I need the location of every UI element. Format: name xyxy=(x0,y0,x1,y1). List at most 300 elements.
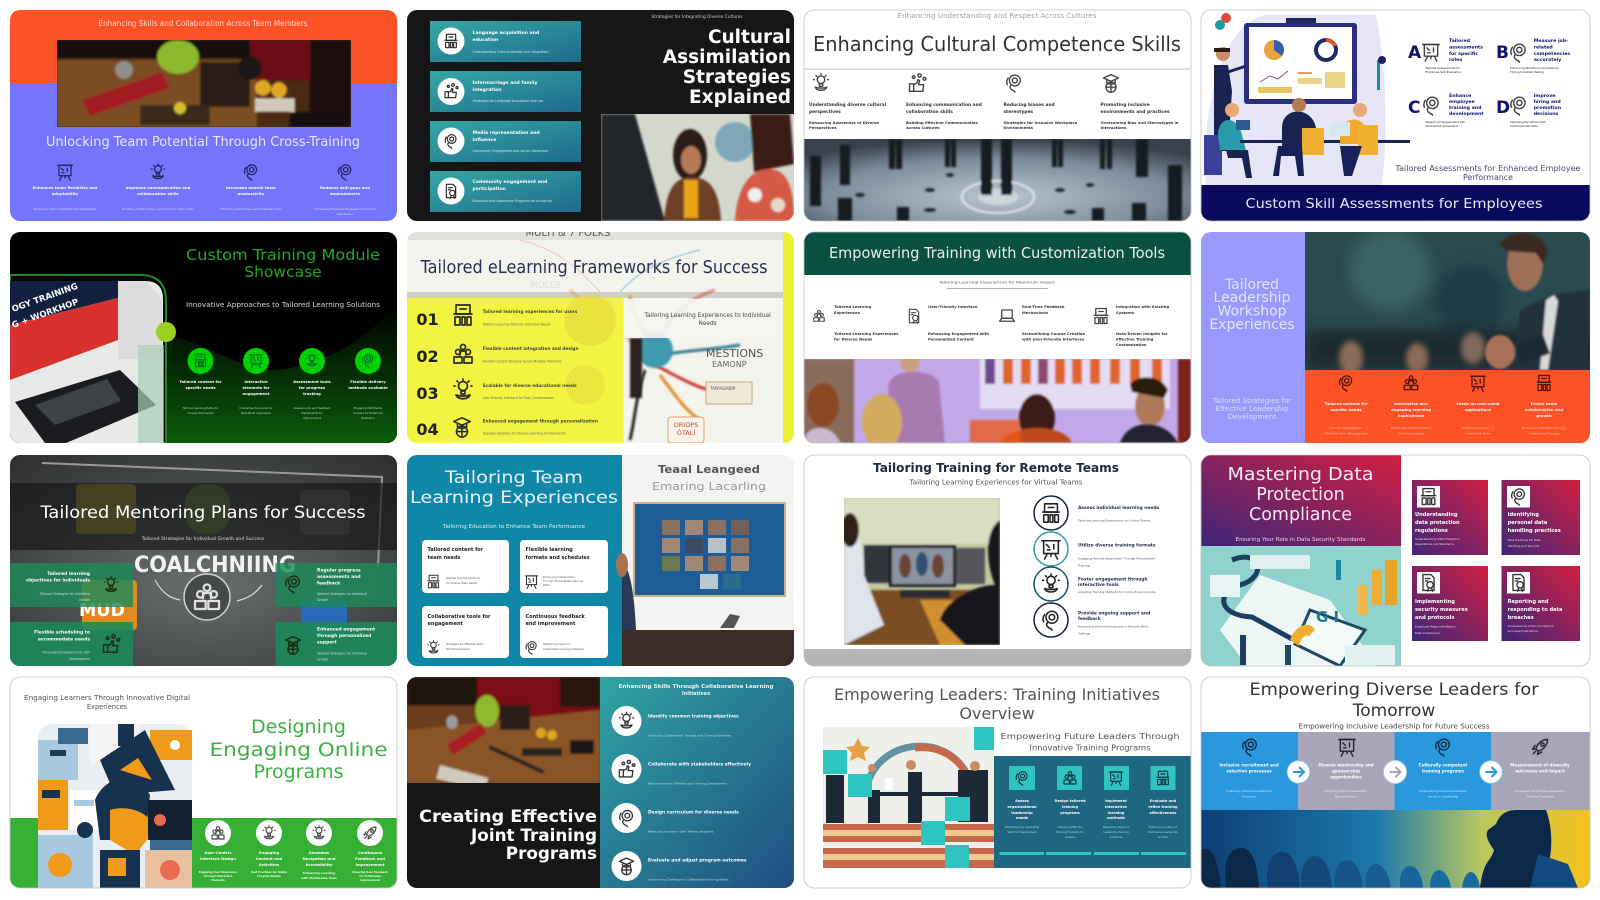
item: navigation: Seamless xyxy=(309,850,330,855)
item: design: Design tailored xyxy=(1054,799,1086,803)
card: continuous feedback: and improvement xyxy=(526,621,576,627)
step: evaluate: Overcoming Challenges in Collaborative Training Efforts xyxy=(648,878,729,882)
item: design: programs xyxy=(1060,811,1080,815)
item: team: Customized Training xyxy=(1529,432,1559,436)
panel: mentoring plans slide xyxy=(10,455,398,666)
title banner xyxy=(804,232,1191,275)
item 04 xyxy=(416,418,598,439)
item: biases: Reducing biases and xyxy=(1004,102,1055,108)
item: feedback: Streamlining Course Creation xyxy=(1022,331,1086,336)
item: engagement: Adapting Training Methods for Online Environments xyxy=(1078,590,1156,594)
title xyxy=(1250,680,1538,721)
title: Engaging Online xyxy=(210,739,388,761)
title: Strategies xyxy=(683,67,791,88)
card: personal data xyxy=(1502,480,1580,555)
subtitle: Innovative Training Programs xyxy=(1030,742,1150,752)
item: inclusive: Overcoming Bias and Stereotypes in xyxy=(1100,120,1179,125)
left column: Tailored xyxy=(1224,277,1279,293)
item D: promotion xyxy=(1534,105,1561,111)
photo: audience silhouettes xyxy=(1201,810,1590,888)
item: engagement xyxy=(1034,567,1156,601)
item: implement: Measuring Impact of xyxy=(1103,825,1129,829)
item: user-centric: User-Centric xyxy=(204,850,232,855)
column: measurement: Training Programs xyxy=(1525,794,1554,798)
item: community: participation xyxy=(472,186,506,192)
item: engaging content: Best Practices for Online xyxy=(251,870,287,874)
item: scheduling: accommodate needs xyxy=(38,636,90,642)
left column: Workshop xyxy=(1217,304,1287,320)
subtitle: Enhancing Understanding and Respect Across Cultures xyxy=(898,11,1097,20)
photo: video conference room: Emaring Lacarling xyxy=(652,481,766,493)
background mind map: MESTIONS xyxy=(706,347,763,360)
title block: Ensuring Your Role in Data Security Standards xyxy=(1236,537,1366,543)
item: intermarriage: integration xyxy=(472,87,502,93)
item: community: Education and Awareness Programs for Inclusivity xyxy=(472,199,552,203)
item 01: Tailored learning experiences for users xyxy=(483,309,578,315)
item: assessment: Improvement xyxy=(303,416,321,420)
column: recruitment xyxy=(1201,732,1298,810)
illustration: isometric documents: G I xyxy=(1316,608,1339,626)
item: integration: Effective Training xyxy=(1116,336,1154,342)
item: engagement: Enhanced engagement xyxy=(317,626,376,632)
item: skill gaps: Increasing Employee Engagement and Job xyxy=(314,207,376,211)
item: progress: Growth xyxy=(317,598,328,602)
background mind map: TAPPAGMIDP xyxy=(709,386,736,391)
title: Overview xyxy=(959,704,1035,723)
card: security: Data Compliance xyxy=(1415,631,1440,635)
item: tailored learning: Experiences xyxy=(834,310,861,315)
item D: D xyxy=(1496,98,1510,118)
item: navigation: Navigation and xyxy=(303,856,336,861)
item: design: Training Programs for xyxy=(1056,830,1085,834)
card: tailored content: Tailored content for xyxy=(428,547,484,553)
item: user-centric: Engaging User Experience xyxy=(199,870,237,874)
item: design: Designing Effective xyxy=(1057,825,1083,829)
item: assess needs xyxy=(1034,496,1160,530)
title: Programs xyxy=(506,843,597,863)
left column: Leadership xyxy=(1214,290,1291,306)
item: communication: Improves communication and xyxy=(126,185,191,190)
item: assess needs: Assess individual learning needs xyxy=(1078,505,1160,511)
subtitle: Empowering Inclusive Leadership for Future Success xyxy=(1298,722,1490,730)
subtitle: Tailored Strategies for Individual Growth and Success xyxy=(141,536,265,542)
orange band xyxy=(1305,370,1590,443)
item: feedback xyxy=(352,820,388,882)
item: assessment: for progress xyxy=(299,385,326,390)
item: evaluate xyxy=(1141,766,1186,855)
item: delivery xyxy=(348,348,388,420)
photo: laptop and training brochure: OGY TRAINING xyxy=(11,282,79,315)
step: objectives xyxy=(612,706,739,738)
title: Tailored eLearning Frameworks for Success xyxy=(420,258,768,278)
step: stakeholders: Collaborate with stakeholders effectively xyxy=(648,762,751,768)
item: delivery: Engaging Multimedia xyxy=(354,406,383,410)
card: personal data: handling practices xyxy=(1508,528,1561,534)
item: media: influence xyxy=(472,137,496,143)
item: evaluate: Fostering a Culture of xyxy=(1149,825,1177,829)
card: breaches: and Legal Implications xyxy=(1508,629,1538,633)
item: tailored content: Diverse Skill Levels xyxy=(188,411,214,415)
subtitle xyxy=(1000,731,1180,752)
column: recruitment: selection processes xyxy=(1226,768,1272,774)
item C: employee xyxy=(1449,99,1475,105)
item 03: User-Friendly Interface for Easy Customization xyxy=(483,396,554,400)
step: evaluate: Evaluate and adjust program outcomes xyxy=(648,858,747,864)
card: breaches: breaches xyxy=(1508,615,1534,621)
item D: Customized Skill Tests xyxy=(1510,124,1538,128)
photo: laptop and training brochure xyxy=(10,275,176,443)
item 03: 03 xyxy=(416,384,439,403)
item: communication: Boosting Collaboration and Communication Skills xyxy=(122,207,194,211)
column: recruitment: Practices xyxy=(1242,794,1256,798)
item: implement: learning xyxy=(1108,811,1125,815)
arrow: first xyxy=(1287,760,1310,784)
item: feedback: Feedback and xyxy=(355,856,385,861)
item: tailored content xyxy=(1324,376,1368,436)
item: community xyxy=(430,171,581,212)
card: personal data: personal data xyxy=(1508,520,1548,526)
item: diverse formats xyxy=(1034,532,1156,568)
panel: online programs slide xyxy=(10,677,397,888)
photo: training equipment xyxy=(57,40,351,127)
item: ongoing support: feedback xyxy=(1078,616,1101,622)
item B: B xyxy=(1496,43,1509,63)
item: integration: Integration with Existing xyxy=(1116,304,1169,309)
item: progress: assessments and xyxy=(317,574,361,580)
item: integration: Systems xyxy=(1116,310,1135,315)
card: collaborative tools: Strategies for Effective Team xyxy=(446,642,484,646)
item: biases: Strategies for Inclusive Workplace xyxy=(1004,120,1078,125)
item: productivity: Increases overall team xyxy=(226,185,276,190)
background mind map: MOLLS xyxy=(530,281,561,291)
item: interactive: experiences xyxy=(1398,413,1425,418)
card: flexible learning: Enhancing Collaboration xyxy=(543,575,575,579)
title: Tailoring Team xyxy=(444,468,583,487)
subtitle: Engaging Learners Through Innovative Digital xyxy=(24,694,190,702)
title xyxy=(210,716,388,783)
panel: diverse leaders slide xyxy=(1201,677,1590,888)
item: language xyxy=(430,21,581,62)
title: Designing xyxy=(251,716,346,738)
item: biases: Environments xyxy=(1004,125,1034,130)
subtitle: Tailored Assessments for Enhanced Employee xyxy=(1394,164,1581,173)
title block: Protection xyxy=(1256,485,1345,505)
item: progress: feedback xyxy=(317,580,341,586)
item: productivity: productivity xyxy=(238,191,265,196)
arrow: third xyxy=(1480,760,1502,784)
item: implement: methods xyxy=(1107,816,1125,820)
card: personal data: Identifying xyxy=(1508,512,1539,518)
item A: assessments xyxy=(1449,44,1483,50)
item 04: 04 xyxy=(416,420,439,439)
photo: presenter with chart xyxy=(804,352,1191,450)
background mind map: ORIOPS xyxy=(674,421,698,429)
item: implement: interactive xyxy=(1105,805,1128,809)
panel: cultural competence slide xyxy=(804,10,1191,221)
card: continuous feedback: Continuous feedback xyxy=(526,614,586,620)
column: training xyxy=(1394,732,1491,810)
title bar xyxy=(1201,185,1590,221)
item: assessment: Assessments and Feedback xyxy=(293,406,331,410)
item: perspectives: Understanding diverse cultural xyxy=(809,102,887,108)
item: inclusive xyxy=(1100,75,1179,130)
item: inclusive: Interactions xyxy=(1100,125,1127,130)
subtitle: Empowering Future Leaders Through xyxy=(1000,731,1180,741)
item: navigation: Enhancing Learning xyxy=(303,871,335,875)
card: security: Employee Responsibilities in xyxy=(1415,624,1456,628)
item: design: training xyxy=(1062,805,1078,809)
photo: laptop and training brochure: G + WORKHOP xyxy=(11,297,80,331)
card: continuous feedback xyxy=(520,606,608,658)
item: interactive: Interactive xyxy=(244,379,268,384)
item: tailored content: Tailored Strategies for xyxy=(1329,426,1363,430)
title: Tailoring Training for Remote Teams xyxy=(873,461,1119,475)
title block: Mastering Data xyxy=(1228,465,1374,485)
item: team: Fostering Innovation Through xyxy=(1522,426,1566,430)
item: feedback: Continuous xyxy=(358,850,383,855)
panel: cultural assimilation slide xyxy=(407,10,794,221)
panel: custom training module slide xyxy=(10,232,397,443)
item: real world xyxy=(1456,376,1500,436)
item: objectives: Tailored learning xyxy=(47,571,90,577)
column: training: Culturally competent xyxy=(1419,762,1467,768)
item: assess xyxy=(1000,766,1044,855)
title: Custom Training Module xyxy=(186,246,380,264)
title: Enhancing Cultural Competence Skills xyxy=(813,32,1181,56)
column: mentorship: Representation xyxy=(1335,794,1357,798)
item: ongoing support xyxy=(1034,603,1150,637)
title: Creating Effective xyxy=(419,806,597,826)
item: perspectives xyxy=(809,74,887,130)
item: team: growth xyxy=(1536,413,1552,418)
item 03: Scalable for diverse educational needs xyxy=(483,383,577,389)
steps column xyxy=(600,677,794,888)
item: interface: User-Friendly Interface xyxy=(928,304,978,309)
item C: training and xyxy=(1449,105,1481,111)
subtitle: Strategies for Integrating Diverse Cultures xyxy=(651,14,743,20)
item: feedback: Improvement xyxy=(360,878,381,882)
title: Showcase xyxy=(244,263,322,281)
subtitle: Tailoring Learning Experiences for Virtual Teams xyxy=(908,478,1083,486)
item: interactive xyxy=(240,348,273,415)
item C xyxy=(1408,93,1484,128)
item: assess: Identifying Key Leadership xyxy=(1005,825,1040,829)
item: tailored learning: Tailored Learning Experiences xyxy=(834,331,899,336)
item: ongoing support: Settings xyxy=(1078,632,1091,636)
illustration: team at a dashboard xyxy=(1204,13,1410,185)
item: language: Language acquisition and xyxy=(472,30,539,36)
step: curriculum xyxy=(612,803,739,834)
panel: team learning slide xyxy=(407,455,794,666)
item: implement xyxy=(1094,766,1139,855)
item: scheduling: Personalized Guidance for Skill xyxy=(42,650,90,654)
item C: Enhance xyxy=(1449,93,1471,99)
item: tailored content: Tailored content for xyxy=(1324,401,1368,406)
panel: skill assessments slide xyxy=(1201,10,1590,221)
item: user-centric: Interface Design xyxy=(200,856,236,861)
item: communication xyxy=(906,74,982,130)
item: flexibility: Enhances team flexibility and xyxy=(33,185,98,190)
item: productivity xyxy=(220,165,282,211)
item A: Employee Skill Evaluation xyxy=(1426,70,1462,74)
item: feedback: Improvement xyxy=(355,862,385,867)
item: intermarriage: Intermarriage and family xyxy=(472,80,537,86)
title: Cultural xyxy=(708,27,791,48)
item: assessment xyxy=(293,348,331,420)
item: assess: leadership xyxy=(1011,811,1033,815)
item: assess needs: Tailoring Learning Experiences for Virtual Teams xyxy=(1077,518,1150,522)
item: real world: Focus on real-world xyxy=(1456,401,1500,406)
heading xyxy=(618,684,774,697)
item A: roles xyxy=(1449,57,1462,63)
column: recruitment: Inclusive recruitment and xyxy=(1219,762,1279,768)
item: implement: Leadership Training xyxy=(1103,830,1129,834)
item: communication: Enhancing communication and xyxy=(906,102,982,108)
left column xyxy=(1201,232,1305,443)
title: Learning Experiences xyxy=(410,488,618,507)
item: diverse formats: Utilize diverse training formats xyxy=(1078,542,1156,548)
column: mentorship: opportunities xyxy=(1330,774,1362,780)
item: interactive: engaging learning xyxy=(1391,407,1431,412)
item B: Through Custom Testing xyxy=(1509,70,1544,74)
item: productivity: Minimizing Skill Gaps and Knowledge Silos xyxy=(220,207,282,211)
item: evaluate: Evaluate and xyxy=(1150,799,1177,803)
heading: Enhancing Skills Through Collaborative Learning xyxy=(618,684,774,690)
item: evaluate: Continuous Leadership xyxy=(1148,830,1178,834)
item: navigation: with Multimedia Tools xyxy=(301,876,337,880)
card: breaches: Consequences of Non-Compliance xyxy=(1508,624,1554,628)
photo: video conference room: Teaal Leangeed xyxy=(658,463,760,476)
item: engagement: Growth xyxy=(317,658,328,662)
item C: Measuring Employee Skills with xyxy=(1426,120,1465,124)
item: interactive: engagement xyxy=(243,391,270,396)
item: interactive: elements for xyxy=(242,385,270,390)
card: regulations: Understanding xyxy=(1415,512,1458,518)
item B: competencies xyxy=(1534,51,1570,57)
item: objectives xyxy=(10,563,133,607)
subtitle: Experiences xyxy=(87,703,128,711)
item: flexibility xyxy=(33,165,98,211)
item: tailored content: Tailored Learning Paths for xyxy=(182,406,219,410)
panel: joint training slide xyxy=(407,677,794,888)
item: communication xyxy=(122,164,194,211)
card: regulations: Regulations and Standards xyxy=(1415,542,1454,546)
item: media: Media representation and xyxy=(472,130,540,136)
item: interactive: Interactive and xyxy=(1394,401,1428,406)
card: flexible learning: Through Personalized Learning xyxy=(543,579,583,583)
card: personal data: Best Practices for Data xyxy=(1508,538,1541,542)
title banner: Empowering Training with Customization Tools xyxy=(829,244,1165,262)
item: communication: Across Cultures xyxy=(906,125,940,130)
side caption: Needs xyxy=(699,321,717,327)
subtitle: Performance xyxy=(1463,173,1513,182)
column: measurement xyxy=(1491,732,1590,810)
item: evaluate: Growth xyxy=(1158,835,1168,839)
item: feedback: Real-Time Feedback xyxy=(1022,304,1065,309)
photo: video call desk xyxy=(841,498,1000,645)
item: perspectives: perspectives xyxy=(809,109,841,115)
item: diverse formats: Training xyxy=(1077,564,1090,568)
left column: Experiences xyxy=(1209,317,1295,333)
item: scheduling xyxy=(10,622,133,666)
item: community: Community engagement and xyxy=(472,179,547,185)
item: flexibility: Enhancing Team Flexibility and Adaptability xyxy=(33,207,97,211)
step: stakeholders xyxy=(612,754,751,786)
item A: for specific xyxy=(1449,51,1478,57)
left column: Development xyxy=(1228,412,1276,421)
item C: C xyxy=(1408,98,1420,118)
card: security: Implementing xyxy=(1415,599,1455,605)
item: implement: Initiatives xyxy=(1110,835,1123,839)
title: Tomorrow xyxy=(1352,701,1435,721)
column: training: Voices in Leadership xyxy=(1428,794,1458,798)
card: continuous feedback: Customized Learning Initiatives xyxy=(543,647,584,651)
card: breaches: responding to data xyxy=(1508,607,1563,613)
item B xyxy=(1496,38,1570,74)
item: assess: Assess xyxy=(1015,799,1029,803)
item: scheduling: Development xyxy=(69,657,91,661)
column: measurement: outcomes and impact xyxy=(1515,768,1565,774)
title: Explained xyxy=(689,87,791,108)
card: collaborative tools: engagement xyxy=(428,621,464,627)
item: tailored learning: for Diverse Needs xyxy=(834,336,873,342)
photo: woman in discussion xyxy=(601,114,794,221)
item: feedback: for Continuous xyxy=(359,874,381,878)
item: perspectives: Enhancing Awareness of Diverse xyxy=(809,120,879,125)
item: communication: collaboration skills xyxy=(137,191,179,196)
item: engagement: interactive tools xyxy=(1078,582,1119,588)
item: delivery: Flexible delivery xyxy=(350,379,386,384)
side caption: Tailoring Learning Experiences to Individual xyxy=(644,313,771,319)
item: design xyxy=(1046,766,1091,855)
item: real world: Leadership Roles xyxy=(1465,432,1491,436)
step: objectives: Enhancing Collaboration Through Joint Training Initiatives xyxy=(648,734,731,738)
card: flexible learning: Flexible learning xyxy=(526,547,573,553)
photo: leader pointing xyxy=(1305,230,1590,375)
column: mentorship: Diverse mentorship and xyxy=(1318,762,1374,768)
item 02: Flexible Content Delivery Across Multiple Platforms xyxy=(483,360,562,364)
title: Tailored Mentoring Plans for Success xyxy=(39,503,366,523)
background mind map xyxy=(407,240,783,443)
chalkboard background: MUD xyxy=(79,600,125,621)
item: tailored learning xyxy=(814,304,899,342)
item 01 xyxy=(416,305,578,329)
item: user-centric: Elements xyxy=(211,878,225,882)
item: engaging content: Content and xyxy=(256,856,283,861)
item: intermarriage: Strategies for Language Acquisition and Use xyxy=(472,99,543,103)
item: language: education xyxy=(472,37,498,43)
item: integration xyxy=(1094,304,1169,347)
chalkboard word: COALCHNIING xyxy=(134,553,296,578)
title: Programs xyxy=(253,761,344,783)
item: navigation xyxy=(301,820,337,880)
subtitle: Enhancing Skills and Collaboration Across Team Members xyxy=(98,19,308,28)
card: breaches xyxy=(1502,566,1580,641)
subtitle: Innovative Approaches to Tailored Learning Solutions xyxy=(186,300,380,309)
column: training: training programs xyxy=(1422,768,1465,774)
card: tailored content: team needs xyxy=(428,555,461,561)
item 02: Flexible content integration and design xyxy=(483,346,579,352)
item D: Optimizing Recruitment with xyxy=(1510,120,1546,124)
subtitle: Tailoring Education to Enhance Team Performance xyxy=(442,524,585,530)
item: inclusive: environments and practices xyxy=(1100,109,1170,115)
item 01: Tailored Learning Paths for Individual Needs xyxy=(482,322,551,326)
item: delivery: methods available xyxy=(348,385,388,390)
card: personal data: Handling and Security xyxy=(1508,544,1540,548)
item B: related xyxy=(1534,44,1553,50)
column: mentorship xyxy=(1298,732,1394,810)
item: skill gaps: Reduces skill gaps and xyxy=(320,185,370,190)
